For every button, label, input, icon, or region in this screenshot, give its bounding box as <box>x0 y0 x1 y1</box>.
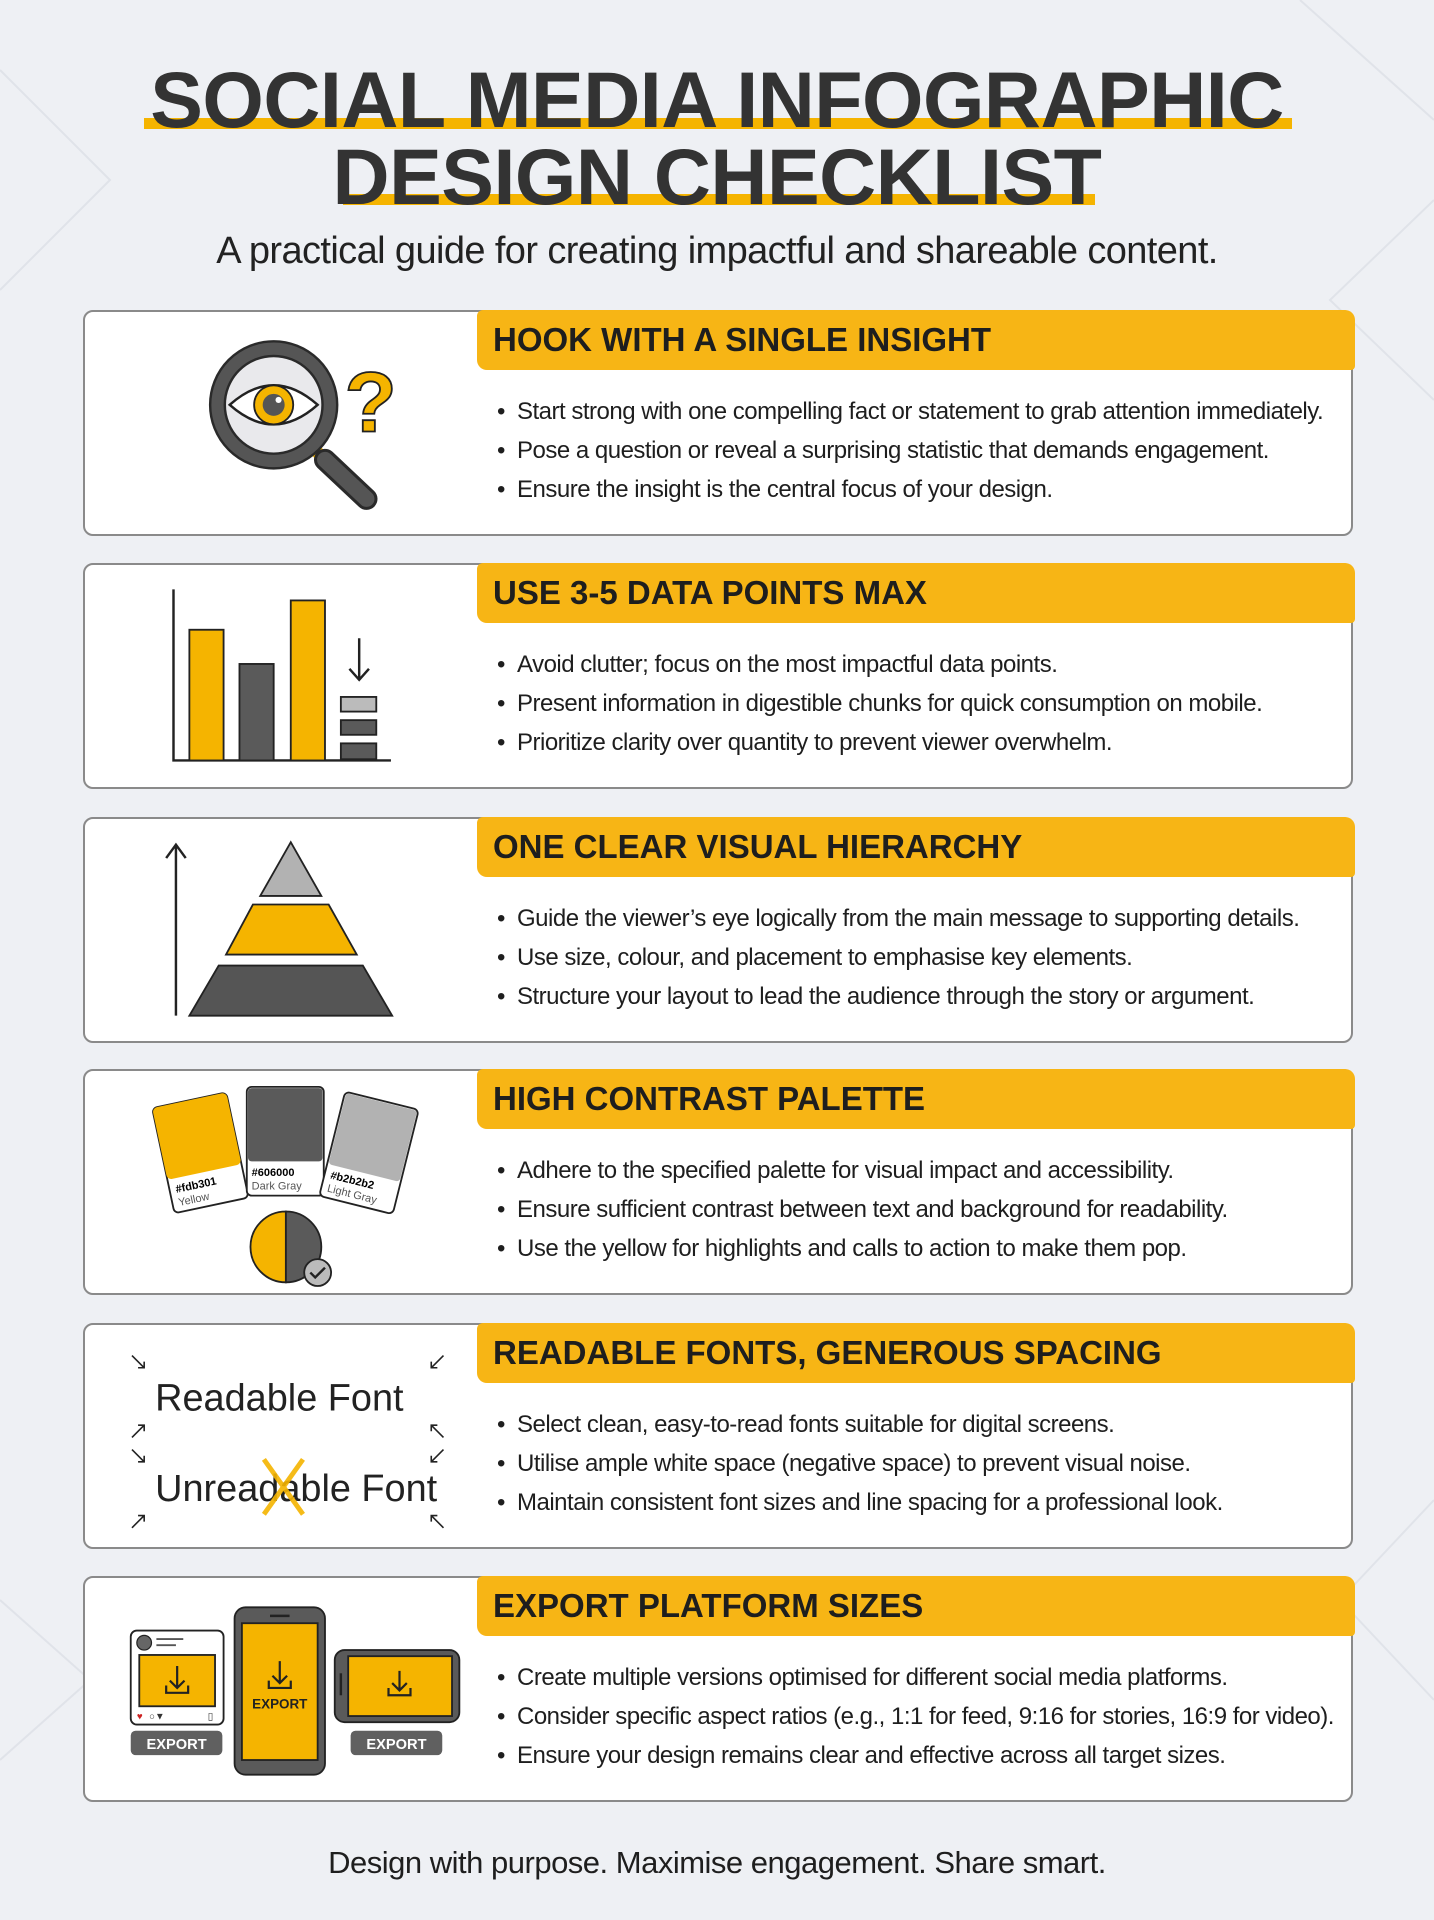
header: HIGH CONTRAST PALETTE <box>493 1080 925 1117</box>
panel: export sizes: Create multiple versions optimised for different social media platforms. <box>517 1664 1228 1691</box>
header <box>477 1069 1355 1129</box>
icon: bar chart <box>172 589 391 762</box>
panel: export sizes: • <box>497 1742 505 1769</box>
panel: export sizes: • <box>497 1703 505 1730</box>
header <box>477 817 1355 877</box>
icon: export devices <box>130 1606 460 1776</box>
header: EXPORT PLATFORM SIZES <box>493 1587 923 1624</box>
footer tagline: Design with purpose. Maximise engagement. Share smart. <box>328 1845 1106 1880</box>
panel: visual hierarchy: Use size, colour, and placement to emphasise key elements. <box>517 944 1132 971</box>
panel: high contrast palette: • <box>497 1196 505 1223</box>
icon: export devices: ♥ <box>137 1712 143 1723</box>
icon: colour swatches: Yellow <box>177 1191 211 1209</box>
panel: high contrast palette: Use the yellow for highlights and calls to action to make them pop. <box>517 1235 1187 1262</box>
icon: readable vs unreadable font: Readable Font <box>155 1378 404 1420</box>
panel: export sizes <box>83 1576 1353 1802</box>
bullets <box>497 651 1262 756</box>
icon: export devices: ○▼ <box>149 1712 165 1723</box>
panel: export sizes: • <box>497 1664 505 1691</box>
panel: export sizes: Ensure your design remains clear and effective across all target sizes. <box>517 1742 1225 1769</box>
panel: high contrast palette: • <box>497 1157 505 1184</box>
panel: data points: • <box>497 651 505 678</box>
panel: hook with a single insight: • <box>497 476 505 503</box>
panel: readable fonts: Maintain consistent font sizes and line spacing for a professional look. <box>517 1489 1223 1516</box>
panel: export sizes: Consider specific aspect ratios (e.g., 1:1 for feed, 9:16 for stories, 16:9 for video). <box>517 1703 1334 1730</box>
panel: visual hierarchy: Structure your layout to lead the audience through the story or argument. <box>517 983 1254 1010</box>
panel: hook with a single insight: Ensure the insight is the central focus of your design. <box>517 476 1052 503</box>
panel: high contrast palette: Adhere to the specified palette for visual impact and accessibility. <box>517 1157 1174 1184</box>
icon: colour swatches: #b2b2b2 <box>329 1170 375 1192</box>
panel: hook with a single insight: Start strong with one compelling fact or statement to grab attention immediately. <box>517 398 1323 425</box>
panel: high contrast palette: • <box>497 1235 505 1262</box>
panel: hook with a single insight <box>83 310 1353 536</box>
panel: visual hierarchy: • <box>497 983 505 1010</box>
bullets <box>497 1411 1223 1516</box>
panel: high contrast palette <box>83 1069 1353 1295</box>
title <box>144 55 1292 221</box>
icon: magnifier with eye <box>208 340 397 510</box>
icon: colour swatches <box>152 1086 419 1287</box>
bullets <box>497 1664 1334 1769</box>
bullets <box>497 905 1299 1010</box>
icon: magnifier with eye: ? <box>345 356 397 451</box>
panel: data points: • <box>497 729 505 756</box>
panel: readable fonts <box>83 1323 1353 1549</box>
panel: hook with a single insight: • <box>497 398 505 425</box>
panel: visual hierarchy: Guide the viewer’s eye logically from the main message to supporting details. <box>517 905 1299 932</box>
panel: readable fonts: • <box>497 1411 505 1438</box>
header: USE 3-5 DATA POINTS MAX <box>493 574 927 611</box>
panel: high contrast palette: Ensure sufficient contrast between text and background for readability. <box>517 1196 1228 1223</box>
title: SOCIAL MEDIA INFOGRAPHIC <box>150 55 1284 144</box>
header <box>477 310 1355 370</box>
panel: hook with a single insight: • <box>497 437 505 464</box>
bullets <box>497 398 1323 503</box>
header <box>477 1323 1355 1383</box>
icon: export devices: ▯ <box>208 1712 213 1723</box>
panel: hook with a single insight: Pose a question or reveal a surprising statistic that demands engagement. <box>517 437 1269 464</box>
header <box>477 563 1355 623</box>
panel: readable fonts: Select clean, easy-to-read fonts suitable for digital screens. <box>517 1411 1114 1438</box>
panel: data points: Avoid clutter; focus on the most impactful data points. <box>517 651 1057 678</box>
panel: readable fonts: • <box>497 1450 505 1477</box>
icon: colour swatches: #fdb301 <box>175 1175 218 1196</box>
subtitle: A practical guide for creating impactful and shareable content. <box>216 230 1218 272</box>
header: READABLE FONTS, GENEROUS SPACING <box>493 1334 1162 1371</box>
icon: readable vs unreadable font: Unreadable Font <box>155 1468 438 1510</box>
icon: colour swatches: #606000 <box>252 1167 294 1179</box>
bullets <box>497 1157 1228 1262</box>
icon: readable vs unreadable font <box>132 1355 444 1528</box>
icon: export devices: EXPORT <box>252 1697 308 1712</box>
icon: pyramid <box>165 840 394 1017</box>
panel: visual hierarchy: • <box>497 905 505 932</box>
header <box>477 1576 1355 1636</box>
panel: data points <box>83 563 1353 789</box>
icon: export devices: EXPORT <box>146 1737 207 1753</box>
icon: export devices: EXPORT <box>366 1737 427 1753</box>
header: HOOK WITH A SINGLE INSIGHT <box>493 321 991 358</box>
panel: data points: • <box>497 690 505 717</box>
header: ONE CLEAR VISUAL HIERARCHY <box>493 828 1022 865</box>
icon: colour swatches: Light Gray <box>326 1183 378 1207</box>
panel: data points: Present information in digestible chunks for quick consumption on mobile. <box>517 690 1262 717</box>
icon: colour swatches: Dark Gray <box>252 1180 302 1192</box>
panel: readable fonts: • <box>497 1489 505 1516</box>
panel: visual hierarchy: • <box>497 944 505 971</box>
title: DESIGN CHECKLIST <box>333 132 1101 221</box>
panel: data points: Prioritize clarity over quantity to prevent viewer overwhelm. <box>517 729 1112 756</box>
panel: visual hierarchy <box>83 817 1353 1043</box>
panel: readable fonts: Utilise ample white space (negative space) to prevent visual noise. <box>517 1450 1191 1477</box>
